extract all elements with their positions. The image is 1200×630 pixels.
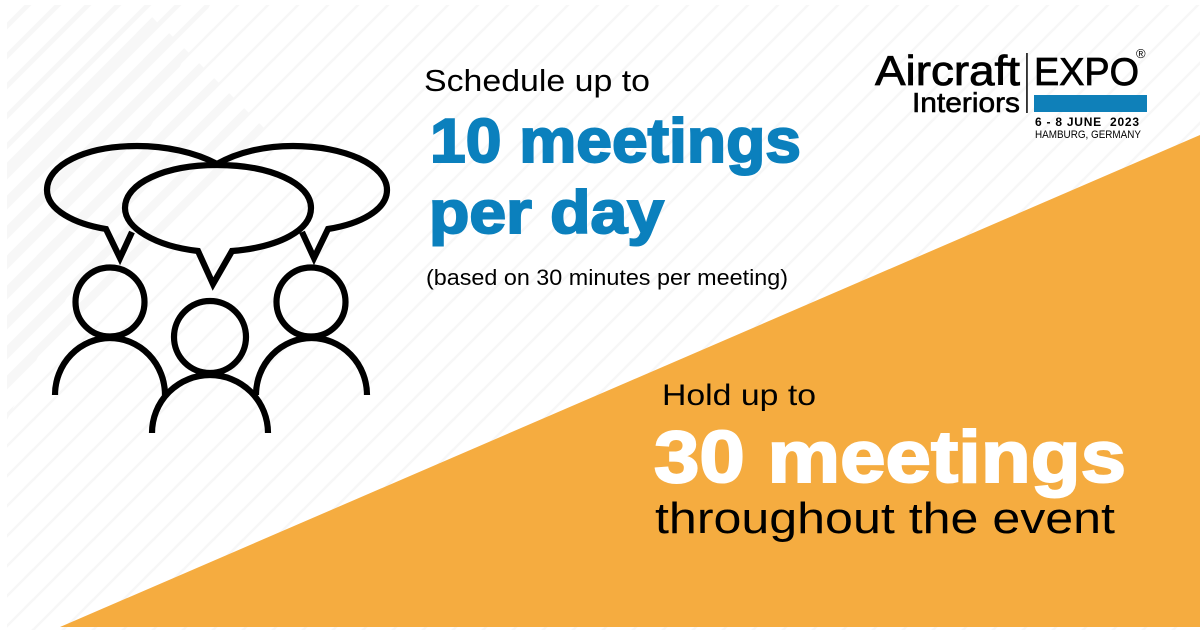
logo wordmark: Aircraft: Aircraft [875, 47, 1020, 94]
left person [55, 268, 165, 395]
heading: 10 meetings per day: 10 meetings [430, 107, 801, 176]
text: throughout the event: throughout the event [655, 494, 1115, 543]
logo wordmark: EXPO: EXPO [1034, 51, 1139, 94]
icon: three people with speech bubbles [47, 146, 387, 433]
heading: 30 meetings: 30 meetings [654, 417, 1126, 498]
logo wordmark: Interiors: Interiors [912, 87, 1020, 118]
right speech bubble [217, 146, 387, 258]
right person [256, 268, 367, 395]
text: based on 30 minutes per meeting: (based on 30 minutes per meeting) [426, 265, 788, 290]
logo date: 6 - 8 JUNE 2023 [1035, 115, 1139, 129]
text: hold up to: Hold up to [662, 379, 816, 412]
logo blue bar [1034, 95, 1147, 112]
logo location: HAMBURG, GERMANY [1035, 129, 1142, 141]
logo registered mark: ® [1136, 46, 1146, 61]
centre person [152, 301, 268, 433]
heading: 10 meetings per day: per day [429, 179, 665, 246]
heading: 10 meetings per day [429, 107, 801, 246]
orange triangle panel [60, 135, 1200, 627]
text: schedule up to: Schedule up to [424, 63, 650, 98]
centre speech bubble [125, 165, 311, 284]
left speech bubble [47, 146, 217, 258]
logo: Aircraft Interiors EXPO [875, 46, 1147, 141]
